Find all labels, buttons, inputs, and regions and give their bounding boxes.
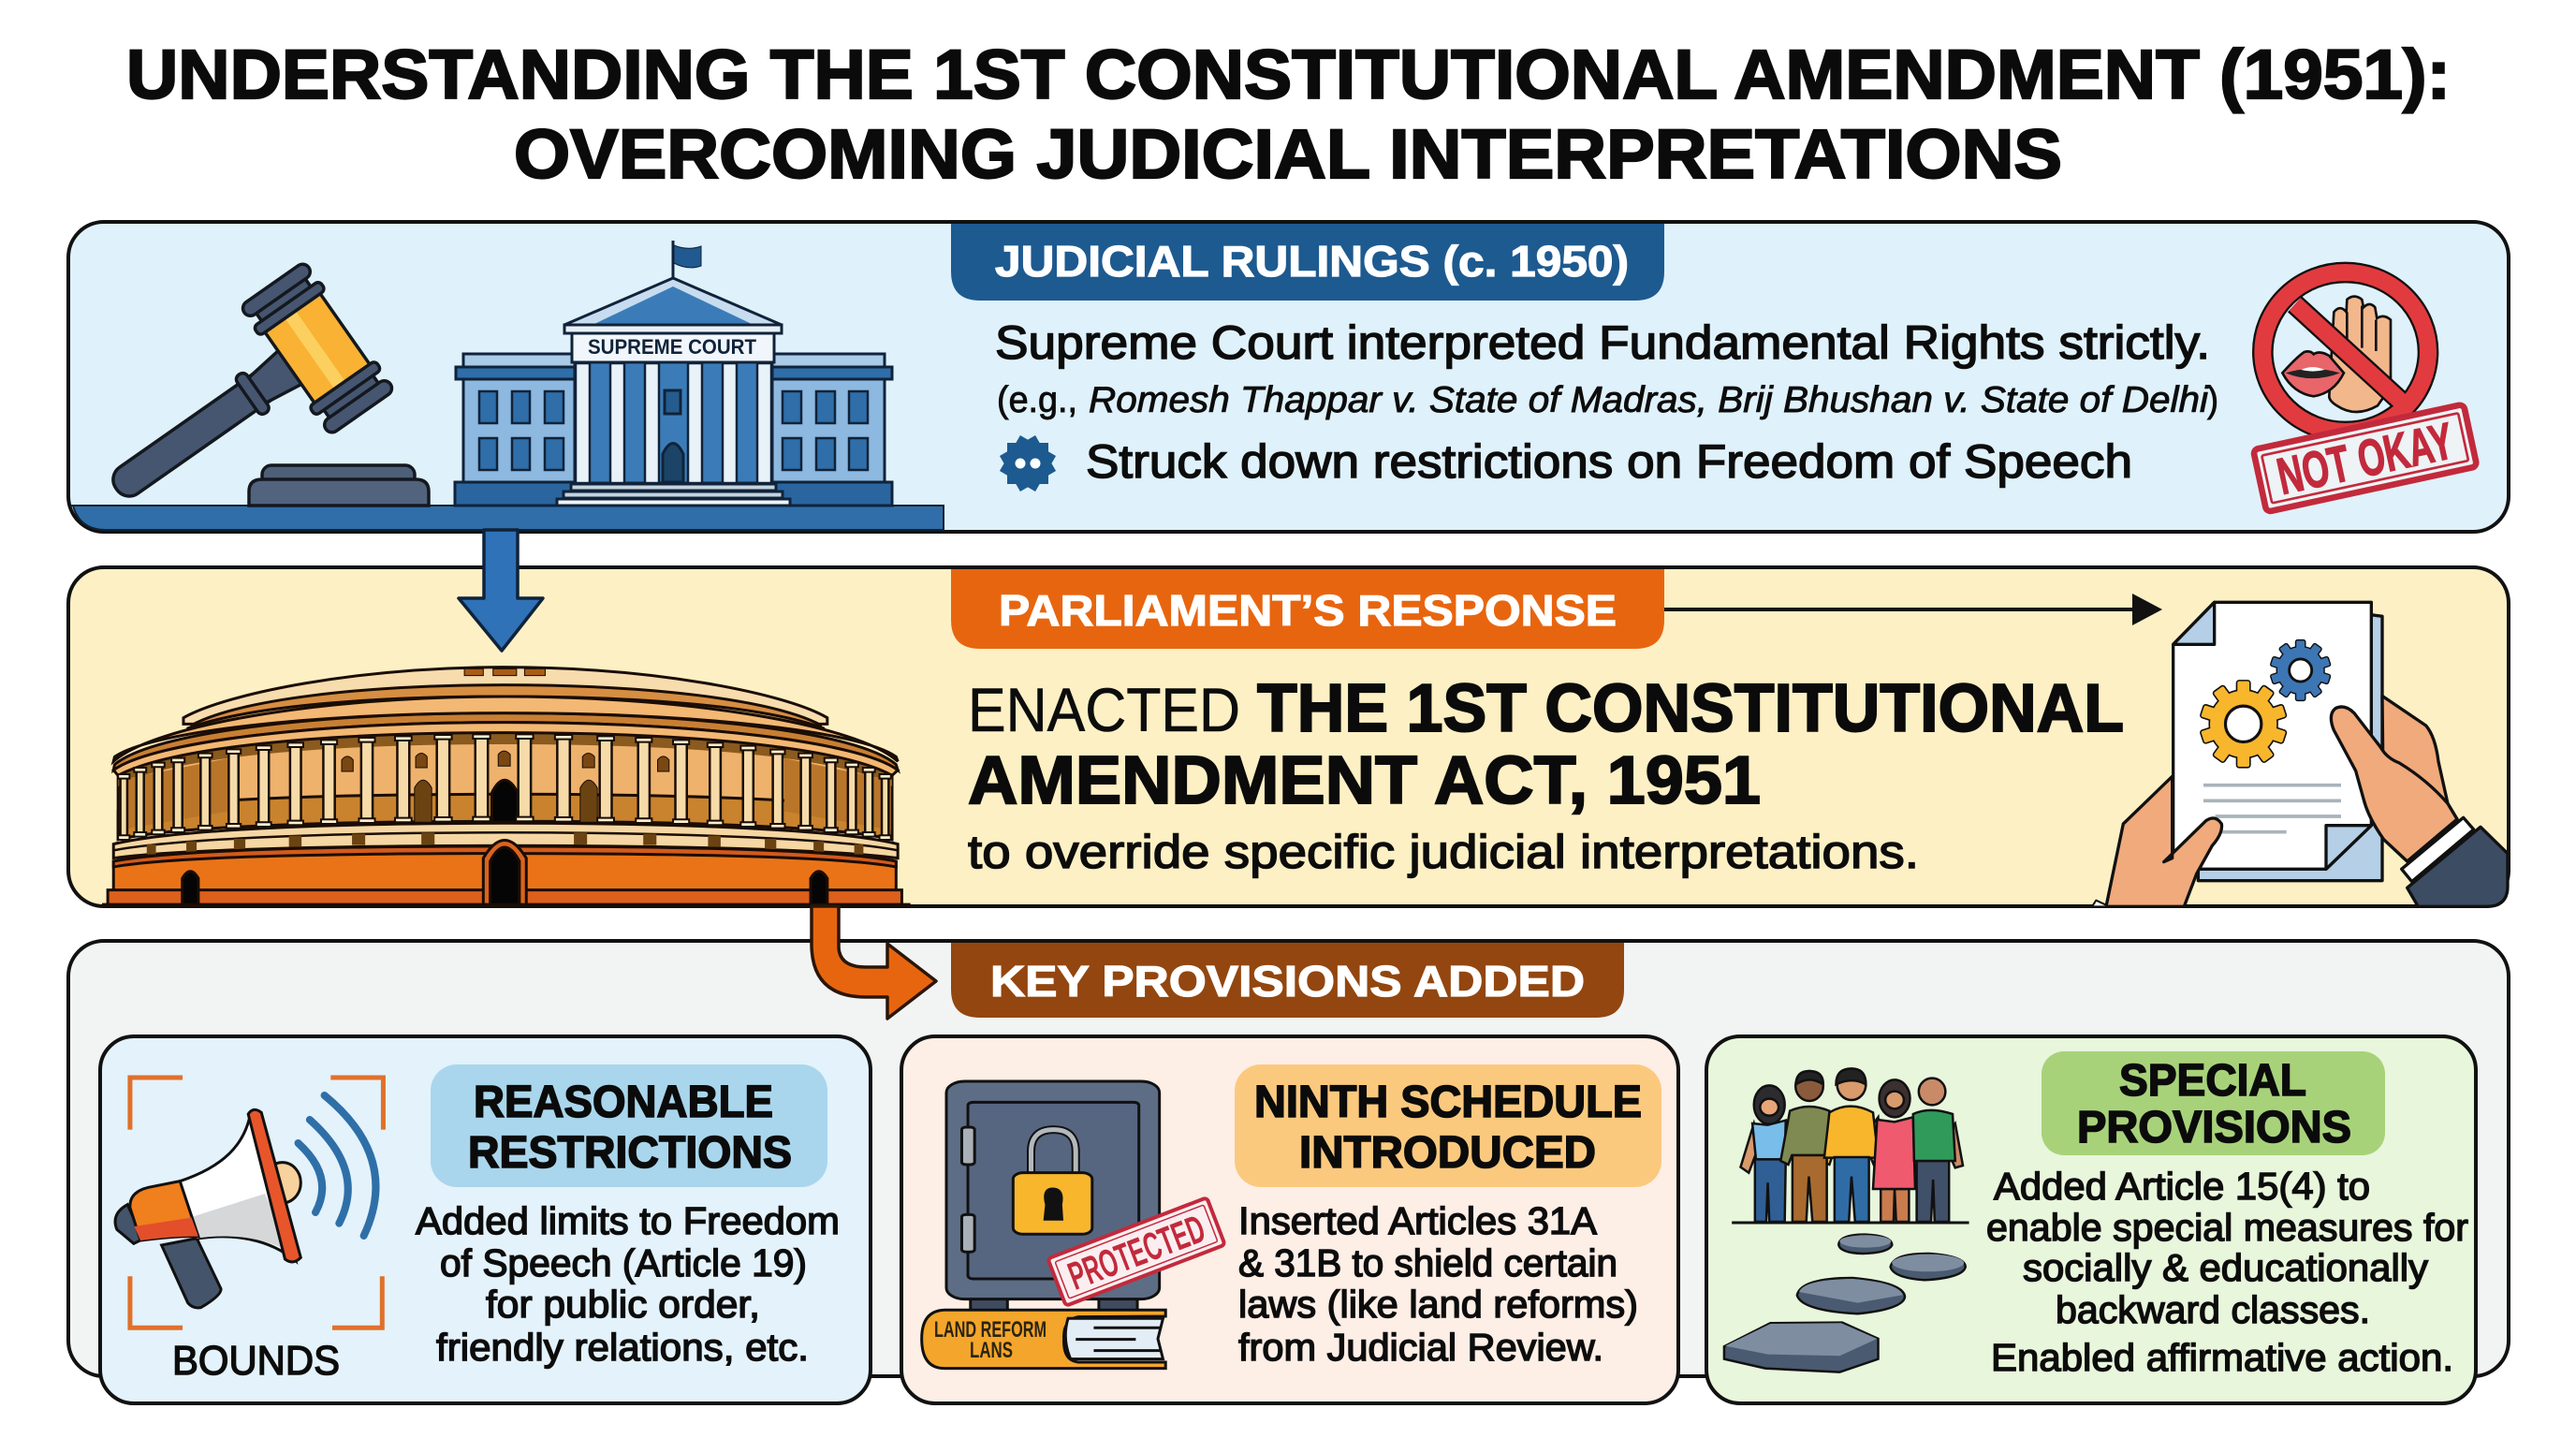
arrow: blue down arrow from court to parliament	[459, 530, 543, 651]
heading: ninth schedule: NINTH SCHEDULE	[1254, 1078, 1642, 1127]
text: special provisions body	[1986, 1165, 2468, 1379]
icon: supreme court building: SUPREME COURT	[588, 335, 757, 359]
header tab: parliament's response: PARLIAMENT’S RESPONSE	[999, 586, 1617, 635]
icon: megaphone in bounds	[115, 1078, 383, 1328]
heading: reasonable restrictions: REASONABLE	[474, 1078, 773, 1127]
text: ninth schedule body	[1238, 1199, 1638, 1369]
panel: judicial rulings	[68, 222, 2509, 553]
heading: special provisions	[2042, 1051, 2385, 1155]
text: land reform book label: LAND REFORM	[934, 1317, 1046, 1343]
text: to override: to override specific judicial interpretations.	[968, 826, 1919, 878]
icon: parliament building	[102, 668, 911, 905]
text: enacted	[968, 671, 2124, 818]
text: land reform book label	[934, 1317, 1046, 1363]
icon: supreme court building	[455, 241, 892, 506]
icon: speech badge	[1000, 435, 1056, 492]
header tab: parliament's response	[951, 569, 1664, 649]
text: bounds: BOUNDS	[172, 1338, 340, 1384]
text: ninth schedule body: & 31B to shield certain	[1238, 1241, 1617, 1284]
stamp: not okay: NOT OKAY	[2272, 411, 2458, 506]
text: supreme court interpreted: Supreme Court interpreted Fundamental Rights strictly.	[995, 316, 2210, 369]
text: enacted: ENACTED	[968, 675, 1240, 744]
arrow: to document	[1664, 594, 2162, 625]
text: enacted: AMENDMENT ACT, 1951	[968, 743, 1761, 818]
heading: special provisions: SPECIAL	[2119, 1056, 2306, 1106]
header tab: judicial rulings	[951, 224, 1664, 301]
arrow: orange arrow from parliament to provisions	[812, 906, 936, 1019]
heading: ninth schedule	[1235, 1064, 1661, 1187]
card: ninth schedule	[901, 1036, 1678, 1403]
text: land reform book label: LANS	[970, 1338, 1013, 1363]
text: reasonable restrictions body: friendly relations, etc.	[436, 1326, 809, 1369]
title: OVERCOMING JUDICIAL INTERPRETATIONS	[514, 115, 2062, 193]
text: case examples: Romesh Thappar v. State of Madras, Brij Bhushan v. State of Delhi	[1089, 380, 2209, 420]
text: reasonable restrictions body: for public order,	[486, 1283, 760, 1326]
header tab: key provisions	[951, 943, 1624, 1018]
text: special provisions body: enable special measures for	[1986, 1206, 2468, 1249]
text: case examples: )	[2207, 380, 2218, 420]
stamp: protected	[1047, 1197, 1225, 1306]
header tab: judicial rulings: JUDICIAL RULINGS (c. 1950)	[995, 237, 1629, 286]
title: UNDERSTANDING THE 1ST CONSTITUTIONAL AMENDMENT (1951):	[126, 36, 2451, 113]
heading: reasonable restrictions: RESTRICTIONS	[468, 1128, 792, 1178]
text: special provisions body: backward classes.	[2056, 1288, 2370, 1331]
heading: ninth schedule: INTRODUCED	[1299, 1128, 1596, 1178]
text: ninth schedule body: Inserted Articles 31A	[1238, 1199, 1598, 1242]
text: special provisions body: Enabled affirmative action.	[1991, 1336, 2453, 1379]
text: special provisions body: Added Article 15(4) to	[1994, 1165, 2370, 1208]
icon: document with gears held in hands	[2092, 602, 2508, 906]
text: ninth schedule body: laws (like land reforms)	[1238, 1283, 1638, 1326]
panel: key provisions added	[68, 941, 2509, 1403]
icon: gavel	[71, 261, 429, 553]
text: reasonable restrictions body: of Speech (Article 19)	[440, 1241, 807, 1284]
ground bar	[70, 506, 944, 530]
text: enacted: THE 1ST CONSTITUTIONAL	[1257, 671, 2124, 746]
title	[126, 36, 2451, 193]
text: reasonable restrictions body: Added limits to Freedom	[416, 1199, 840, 1242]
stamp: protected: PROTECTED	[1062, 1206, 1211, 1299]
text: reasonable restrictions body	[416, 1199, 840, 1369]
icon: people and stepping stones	[1724, 1068, 1969, 1372]
stamp: not okay	[2253, 404, 2477, 512]
text: ninth schedule body: from Judicial Review.	[1238, 1326, 1603, 1369]
panel: parliament's response	[68, 567, 2509, 906]
text: special provisions body: socially & educationally	[2023, 1246, 2428, 1289]
heading: reasonable restrictions	[431, 1064, 827, 1187]
header tab: key provisions: KEY PROVISIONS ADDED	[990, 957, 1585, 1005]
icon: no speech sign	[2262, 272, 2428, 432]
text: struck down: Struck down restrictions on Freedom of Speech	[1086, 435, 2132, 488]
text: case examples: (e.g.,	[997, 380, 1077, 420]
card: special provisions	[1706, 1036, 2476, 1403]
icon: safe with padlock on book	[922, 1081, 1165, 1369]
heading: special provisions: PROVISIONS	[2077, 1103, 2351, 1152]
card: reasonable restrictions	[100, 1036, 871, 1403]
